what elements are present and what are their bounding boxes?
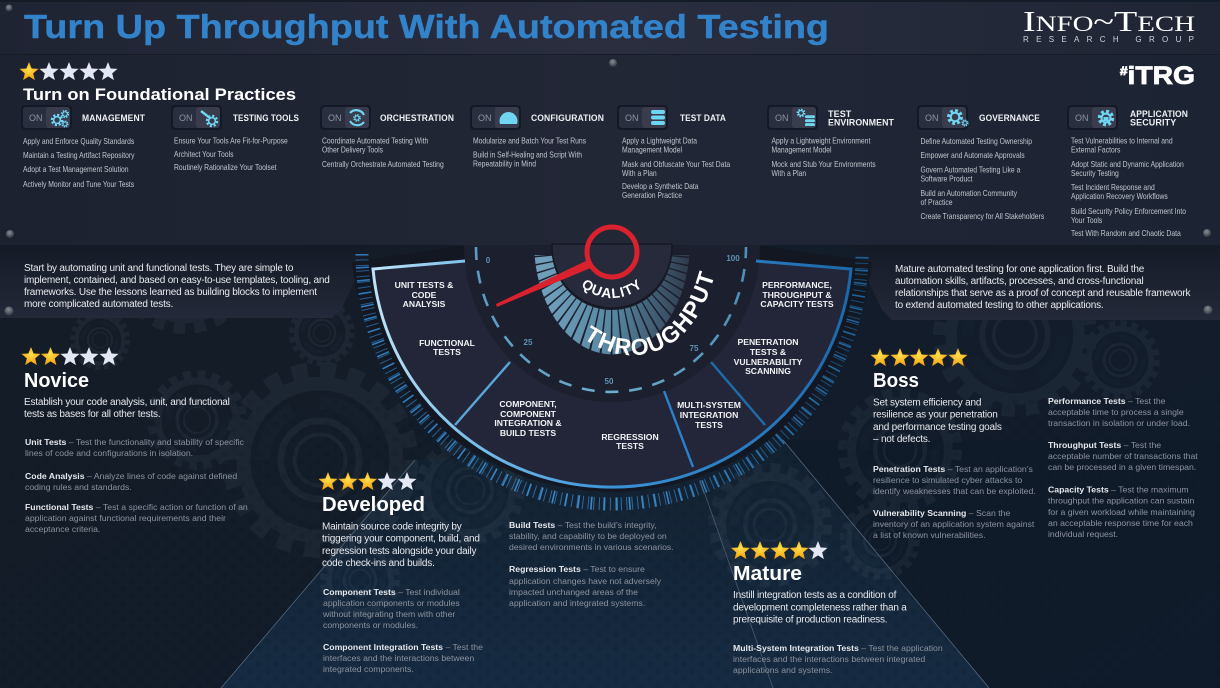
stage: mature: [731, 541, 943, 675]
gauge outer arc: [373, 261, 851, 487]
stage: novice: Code Analysis: [25, 471, 85, 481]
stage: developed: Component Tests: [323, 587, 396, 597]
stage: novice: acceptance criteria.: [25, 524, 100, 534]
stage: boss: resilience as your penetration: [873, 410, 998, 420]
icon: database: [651, 110, 665, 125]
icon: gear and database: [798, 110, 815, 126]
stage: developed: Build Tests: [509, 520, 555, 530]
practice: test environment: [767, 105, 894, 178]
stage: boss: acceptable time to process a single: [1048, 407, 1184, 417]
practice: orchestration: Centrally Orchestrate Automated Testing: [322, 159, 444, 169]
stage: developed: without integrating them with other: [322, 609, 455, 619]
stage: developed: impacted unchanged areas of the: [509, 587, 638, 597]
practice: test environment: Management Model: [772, 145, 832, 155]
practice: testing tools: Architect Your Tools: [174, 149, 234, 159]
practice: testing tools: TESTING TOOLS: [233, 113, 299, 123]
stage: mature: prerequisite of production readiness.: [733, 614, 887, 626]
practice: governance: Govern Automated Testing Like a: [920, 165, 1021, 175]
stage: developed: – Test to ensure: [581, 564, 645, 574]
throughput label: THROUGHPUT: [588, 270, 714, 356]
practice: test environment: With a Plan: [772, 168, 806, 178]
stage: novice: Novice: [24, 370, 89, 392]
title bar: [0, 2, 1220, 54]
practice: configuration: ON: [478, 113, 492, 123]
stage: boss: resilience to simulated cyber attacks to: [873, 475, 1022, 485]
stage: developed: application and integrated systems.: [509, 598, 645, 608]
quality hub: [552, 244, 672, 308]
top practices panel: [0, 55, 1220, 245]
stage: novice: application against functional requirements and their: [25, 513, 226, 523]
practice: governance: Empower and Automate Approvals: [920, 150, 1025, 160]
segment labels: INTEGRATION &: [494, 418, 562, 428]
stage: developed: application components or modules: [323, 598, 460, 608]
practice: orchestration: ORCHESTRATION: [380, 113, 454, 123]
practice: governance: Create Transparency for All Stakeholders: [920, 211, 1045, 221]
scale numbers: 75: [690, 344, 699, 353]
intro text: mature one application: relationships that serve as a proof of concept and reusable framework: [895, 288, 1191, 299]
stage: novice: coding rules and standards.: [25, 482, 132, 492]
segment labels: FUNCTIONAL: [419, 338, 475, 348]
scale numbers: 0: [486, 256, 491, 265]
practice: application security: Application Recovery Workflows: [1071, 191, 1168, 201]
stage: developed: triggering your component, build, and: [322, 534, 480, 544]
needle: [496, 227, 637, 307]
practice: management: MANAGEMENT: [82, 113, 145, 123]
stage: boss: Vulnerability Scanning: [873, 508, 966, 518]
intro panel: left: [0, 245, 372, 318]
practice: testing tools: Routinely Rationalize Your Toolset: [174, 162, 276, 172]
hashtag logo: #iTRG: #: [1120, 64, 1128, 78]
stage: boss: Set system efficiency and: [873, 398, 981, 408]
segment dividers: [455, 362, 765, 467]
practice: governance: [917, 105, 1045, 221]
stage: novice: Establish your code analysis, unit, and functional: [24, 397, 230, 408]
segment labels: COMPONENT: [500, 409, 557, 419]
segment labels: REGRESSION: [601, 432, 659, 442]
segment labels: INTEGRATION: [680, 410, 738, 420]
segment labels: ANALYSIS: [403, 299, 446, 309]
stage: developed: – Test individual: [396, 587, 460, 597]
practice: governance: Software Product: [920, 174, 973, 184]
scale numbers: 100: [726, 254, 740, 263]
practice: management: ON: [29, 113, 42, 123]
segment labels: TESTS: [433, 347, 461, 357]
stage: boss: – Test the: [1121, 440, 1161, 450]
practice: test data: [617, 105, 731, 200]
heading: turn on foundational practices: Turn on Foundational Practices: [23, 85, 296, 104]
stage: boss: – Test an application’s: [945, 464, 1033, 474]
segment labels: [395, 280, 834, 451]
practice: test data: ON: [625, 113, 638, 123]
stage: novice: tests as bases for all other tests.: [24, 409, 160, 420]
hashtag logo: #iTRG: iTRG: [1128, 62, 1195, 90]
stage: boss: [870, 348, 1198, 540]
segment labels: MULTI-SYSTEM: [677, 400, 741, 410]
practice: test data: Mask and Obfuscate Your Test Data: [622, 159, 731, 169]
stage: developed: – Test the: [443, 642, 483, 652]
segment labels: UNIT TESTS &: [395, 280, 453, 290]
segment labels: PERFORMANCE,: [762, 280, 832, 290]
icon: gauge: [500, 112, 518, 124]
segment labels: BUILD TESTS: [500, 428, 556, 438]
intro text: start small: frameworks. Use the lessons learned as building blocks to implement: [24, 287, 317, 298]
practice: configuration: Modularize and Batch Your Test Runs: [473, 136, 586, 146]
logo: Info-Tech Research Group: INFO ~T ECH: [1023, 6, 1195, 38]
novice stars: [21, 347, 119, 365]
practice: configuration: Build in Self-Healing and Script With: [473, 150, 582, 160]
stage: developed: interfaces and the interactions between: [323, 653, 474, 663]
practice: application security: Security Testing: [1071, 168, 1119, 178]
stage: developed: stability, and capability to be deployed on: [509, 531, 667, 541]
practice: application security: ON: [1075, 113, 1088, 123]
rays: [534, 255, 690, 354]
practice: application security: Test Incident Response and: [1071, 182, 1155, 192]
stage: developed: [318, 472, 674, 674]
practice: orchestration: ON: [328, 113, 342, 123]
scale numbers: 25: [524, 338, 533, 347]
practice: test data: Management Model: [622, 145, 682, 155]
practice: test environment: Mock and Stub Your Environments: [772, 159, 876, 169]
stage: developed: desired environments in various scenarios.: [509, 542, 674, 552]
practice: test data: Develop a Synthetic Data: [622, 181, 699, 191]
stage: mature: Multi-System Integration Tests: [733, 643, 859, 653]
practice: management: Apply and Enforce Quality Standards: [23, 136, 135, 146]
stage: boss: a list of known vulnerabilities.: [873, 530, 986, 540]
practice: management: Maintain a Testing Artifact Repository: [23, 150, 135, 160]
gauge face: [373, 245, 851, 487]
practice: application security: Adopt Static and Dynamic Application: [1071, 159, 1184, 169]
practice: governance: of Practice: [920, 197, 953, 207]
stage: boss: inventory of an application system against: [873, 519, 1035, 529]
practice: testing tools: ON: [179, 113, 192, 123]
tick ring: [362, 254, 862, 504]
stage: boss: – Test the: [1126, 396, 1166, 406]
mature stars: [731, 541, 828, 559]
title: Turn Up Throughput With Automated Testing: [24, 8, 829, 45]
logo: Info-Tech Research Group: RESEARCH GROUP: [1023, 35, 1194, 44]
stage: boss: for a given workload while maintaining: [1048, 507, 1195, 517]
intro text: mature one application: to extend automated testing to other applications.: [895, 300, 1103, 311]
stage: developed: Regression Tests: [509, 564, 581, 574]
stage: developed: integrated components.: [323, 664, 414, 674]
practice: configuration: [470, 105, 604, 169]
practice: orchestration: Other Delivery Tools: [322, 145, 383, 155]
practice: application security: External Factors: [1071, 145, 1121, 155]
screws: [4, 4, 1212, 316]
practice: application security: Your Tools: [1071, 215, 1103, 225]
segment labels: THROUGHPUT &: [762, 290, 832, 300]
boss stars: [870, 348, 968, 366]
practice: test environment: TEST: [828, 109, 852, 119]
stage: novice: Unit Tests: [25, 437, 67, 447]
practice: configuration: Repeatability in Mind: [473, 159, 536, 169]
segment labels: TESTS &: [750, 347, 786, 357]
segment labels: TESTS: [616, 441, 644, 451]
segment labels: CAPACITY TESTS: [760, 299, 834, 309]
stage: mature: development completeness rather than a: [733, 602, 907, 614]
segment labels: TESTS: [695, 420, 723, 430]
stage: developed: Component Integration Tests: [323, 642, 443, 652]
stage: mature: applications and systems.: [733, 665, 832, 675]
practice: test environment: ENVIRONMENT: [828, 118, 894, 128]
stage: boss: can be processed in a given timespan.: [1048, 462, 1196, 472]
practice: application security: Test Vulnerabilities to Internal and: [1071, 136, 1173, 146]
stage: novice: Functional Tests: [25, 502, 94, 512]
stage: boss: – Scan the: [966, 508, 1010, 518]
practice: management: Adopt a Test Management Solution: [23, 164, 129, 174]
stage: boss: acceptable number of transactions that: [1048, 451, 1198, 461]
practice: governance: GOVERNANCE: [979, 113, 1040, 123]
stage: developed: components or modules.: [323, 620, 418, 630]
intro text: mature one application: Mature automated testing for one application first. Build the: [895, 264, 1145, 275]
stage: boss: – not defects.: [873, 434, 930, 445]
intro text: mature one application: automation skills, artifacts, processes, and cross-functional: [895, 276, 1143, 287]
practice: application security: SECURITY: [1130, 118, 1176, 128]
gauge: [352, 224, 872, 510]
practice: test data: TEST DATA: [680, 113, 726, 123]
segment labels: VULNERABILITY: [734, 357, 803, 367]
stage: novice: – Test the functionality and stability of specific: [66, 437, 245, 447]
stage: developed: application changes have not adversely: [509, 576, 662, 586]
practice: test environment: Apply a Lightweight Environment: [772, 136, 870, 146]
practice: governance: Build an Automation Community: [920, 188, 1017, 198]
stage: mature: interfaces and the interactions between integrated: [733, 654, 925, 664]
dashed throughput scale: [476, 247, 746, 392]
stage: novice: lines of code and configurations in isolation.: [25, 448, 193, 458]
stage: boss: Throughput Tests: [1048, 440, 1121, 450]
practice: management: [21, 105, 145, 189]
intro text: start small: Start by automating unit and functional tests. They are simple to: [24, 263, 294, 274]
stage: boss: individual request.: [1048, 529, 1118, 539]
icon: wrench and gear: [201, 111, 217, 126]
practice: application security: APPLICATION: [1130, 109, 1188, 119]
practice: application security: Test With Random and Chaotic Data: [1071, 228, 1182, 238]
practice: test data: Generation Practice: [622, 190, 682, 200]
practice: testing tools: [171, 105, 299, 172]
practice: configuration: CONFIGURATION: [531, 113, 604, 123]
icon: governance gears: [949, 111, 968, 126]
stage: mature: Instill integration tests as a condition of: [733, 590, 897, 601]
icon: security gear and lock: [1100, 112, 1112, 124]
stage: developed: – Test the build’s integrity,: [555, 520, 657, 530]
practice: application security: Build Security Policy Enforcement Into: [1071, 206, 1186, 216]
segment labels: SCANNING: [745, 366, 791, 376]
stage: developed: regression tests alongside your daily: [322, 546, 477, 557]
stage: developed: code check-ins and builds.: [322, 558, 435, 569]
stage: boss: transaction in isolation or under load.: [1048, 418, 1190, 428]
practice: test data: With a Plan: [622, 168, 657, 178]
practice: orchestration: Coordinate Automated Testing With: [322, 136, 428, 146]
stage: boss: Capacity Tests: [1048, 484, 1109, 494]
practice: test environment: ON: [775, 113, 788, 123]
stage: boss: identify weaknesses that can be exploited.: [873, 486, 1036, 496]
intro text: start small: implement, contained, and based on easy-to-use templates, tooling, and: [24, 275, 330, 286]
stage: boss: Penetration Tests: [873, 464, 945, 474]
practice: application security: [1067, 105, 1188, 238]
stage: boss: Boss: [873, 370, 919, 392]
foundational stars: one of five: [19, 62, 118, 80]
segment labels: CODE: [412, 290, 437, 300]
developed stars: [318, 472, 417, 490]
scale numbers: 50: [605, 377, 614, 386]
practice: governance: ON: [925, 113, 938, 123]
stage: boss: Performance Tests: [1048, 396, 1126, 406]
quality label: QUALITY: [582, 279, 640, 298]
stage: mature: Mature: [733, 563, 802, 585]
practice: management: Actively Monitor and Tune Your Tests: [23, 179, 134, 189]
practice: orchestration: [320, 105, 454, 169]
segment labels: COMPONENT,: [499, 399, 557, 409]
intro panel: right: [852, 245, 1220, 320]
practice: governance: Define Automated Testing Ownership: [920, 136, 1032, 146]
stage: novice: [21, 347, 248, 534]
segment labels: PENETRATION: [738, 337, 798, 347]
stage: developed: Developed: [322, 494, 425, 516]
stage: boss: and performance testing goals: [873, 422, 1002, 433]
stage: developed: Maintain source code integrity by: [322, 522, 462, 532]
practice: test data: Apply a Lightweight Data: [622, 136, 698, 146]
icon: gears: [52, 111, 68, 127]
stage: boss: throughput the application can sustain: [1048, 496, 1195, 506]
stage: boss: an acceptable response time for each: [1048, 518, 1193, 528]
stage: boss: – Test the maximum: [1109, 484, 1189, 494]
practice: testing tools: Ensure Your Tools Are Fit-for-Purpose: [174, 136, 288, 146]
stage: novice: – Test a specific action or function of an: [93, 502, 248, 512]
icon: orchestration cycle: [350, 110, 364, 125]
stage: mature: – Test the application: [859, 643, 943, 653]
intro text: start small: more complicated automated tests.: [24, 299, 173, 310]
stage: novice: – Analyze lines of code against defined: [85, 471, 237, 481]
scale numbers: [486, 254, 740, 386]
gauge backplate: [352, 245, 872, 492]
